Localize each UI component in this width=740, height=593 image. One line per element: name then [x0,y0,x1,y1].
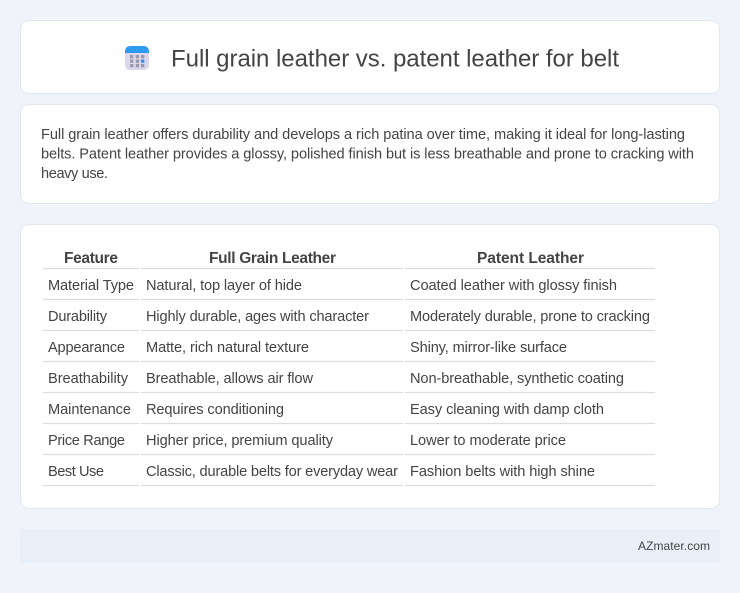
row: durability: Moderately durable, prone to cracking [410,309,650,325]
row: appearance: Matte, rich natural texture [146,340,309,356]
row: appearance: Shiny, mirror-like surface [410,340,567,356]
table header [64,250,584,267]
table header: Full Grain Leather [209,250,336,267]
table header: Feature [64,250,118,267]
icon: calendar [125,46,149,70]
row: breathability: Breathability [48,371,129,387]
row: material type: Coated leather with glossy finish [410,278,617,294]
row: breathability: Non-breathable, synthetic coating [410,371,624,387]
row: best use: Classic, durable belts for everyday wear [146,464,398,480]
panel: summary card [20,104,720,204]
row: breathability [48,371,624,387]
panel: title card [20,20,720,94]
row: price range: Price Range [48,433,125,449]
summary text: heavy use. [41,166,108,182]
footer bar [20,529,720,563]
row: material type [48,278,617,294]
panel: comparison table card [20,224,720,508]
table header: Patent Leather [477,250,584,267]
row: durability: Durability [48,309,108,325]
footer credit: AZmater.com [638,539,710,553]
summary text [41,127,694,182]
row: best use: Fashion belts with high shine [410,464,595,480]
table rules [43,268,655,486]
row: price range: Higher price, premium quality [146,433,334,449]
row: maintenance: Maintenance [48,402,131,418]
row: price range [48,433,566,449]
row: material type: Material Type [48,278,134,294]
row: maintenance: Requires conditioning [146,402,284,418]
row: best use: Best Use [48,464,104,480]
row: best use [48,464,595,480]
summary text: belts. Patent leather provides a glossy, polished finish but is less breathable and prone to cracking with [41,146,694,162]
row: price range: Lower to moderate price [410,433,566,449]
row: maintenance [48,402,604,418]
row: breathability: Breathable, allows air flow [146,371,313,387]
row: appearance [48,340,567,356]
row: durability: Highly durable, ages with character [146,309,369,325]
row: material type: Natural, top layer of hide [146,278,302,294]
row: maintenance: Easy cleaning with damp cloth [410,402,604,418]
row: appearance: Appearance [48,340,125,356]
title: Full grain leather vs. patent leather for belt [171,46,619,72]
row: durability [48,309,650,325]
summary text: Full grain leather offers durability and develops a rich patina over time, making it ideal for long-lasting [41,127,685,143]
